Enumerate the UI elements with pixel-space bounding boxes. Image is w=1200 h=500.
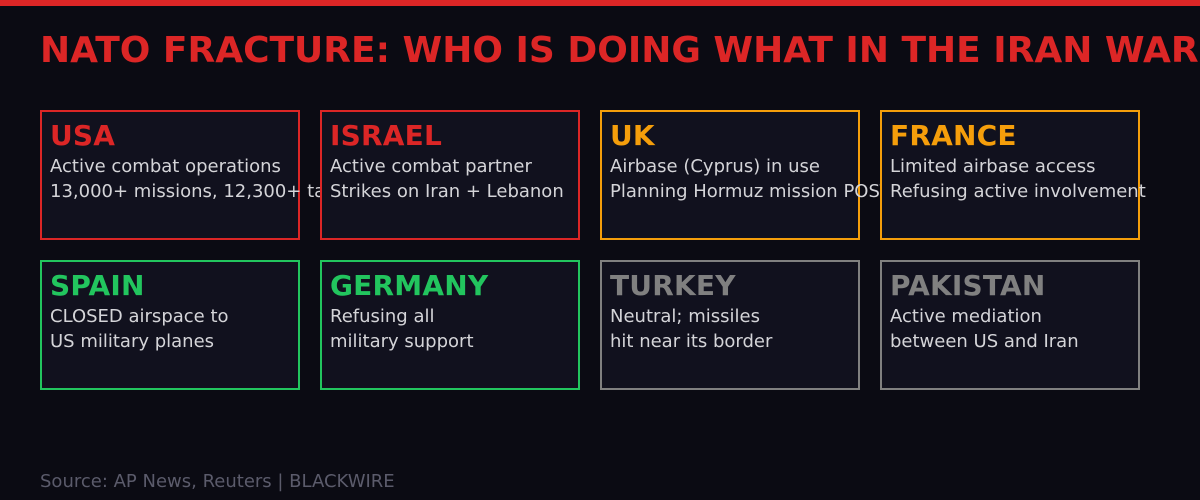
panel: Israel: ISRAEL — [330, 119, 442, 152]
panel: Israel: Strikes on Iran + Lebanon — [330, 181, 564, 202]
panel: Turkey: hit near its border — [610, 331, 772, 352]
panel: Spain: SPAIN — [50, 269, 145, 302]
panel: Israel: Active combat partner — [330, 156, 532, 177]
panel: Pakistan: PAKISTAN — [890, 269, 1046, 302]
panel: Germany: GERMANY — [330, 269, 488, 302]
panel: Turkey: Neutral; missiles — [610, 306, 760, 327]
source footer: Source: AP News, Reuters | BLACKWIRE — [40, 471, 395, 492]
panel: Pakistan: between US and Iran — [890, 331, 1079, 352]
panel: Turkey — [600, 260, 860, 390]
panel: France: Refusing active involvement — [890, 181, 1146, 202]
panel: Pakistan: Active mediation — [890, 306, 1042, 327]
panel: Spain — [40, 260, 300, 390]
panel: Germany: military support — [330, 331, 474, 352]
panel: UK: Planning Hormuz mission POST-war — [610, 181, 929, 202]
panel: USA — [40, 110, 300, 240]
panel: France: FRANCE — [890, 119, 1017, 152]
panel: UK: Airbase (Cyprus) in use — [610, 156, 820, 177]
panel: Israel — [320, 110, 580, 240]
title: NATO FRACTURE: WHO IS DOING WHAT IN THE IRAN WAR — [40, 30, 1199, 71]
panel: UK: UK — [610, 119, 655, 152]
panel: USA: Active combat operations — [50, 156, 281, 177]
panel: Pakistan — [880, 260, 1140, 390]
panel: France — [880, 110, 1140, 240]
panel: Spain: US military planes — [50, 331, 214, 352]
panel: Spain: CLOSED airspace to — [50, 306, 229, 327]
panel: USA: USA — [50, 119, 115, 152]
panel: UK — [600, 110, 860, 240]
panel: Germany — [320, 260, 580, 390]
panel: France: Limited airbase access — [890, 156, 1096, 177]
panel: Germany: Refusing all — [330, 306, 434, 327]
panel: Turkey: TURKEY — [610, 269, 736, 302]
panel: USA: 13,000+ missions, 12,300+ targets — [50, 181, 371, 202]
